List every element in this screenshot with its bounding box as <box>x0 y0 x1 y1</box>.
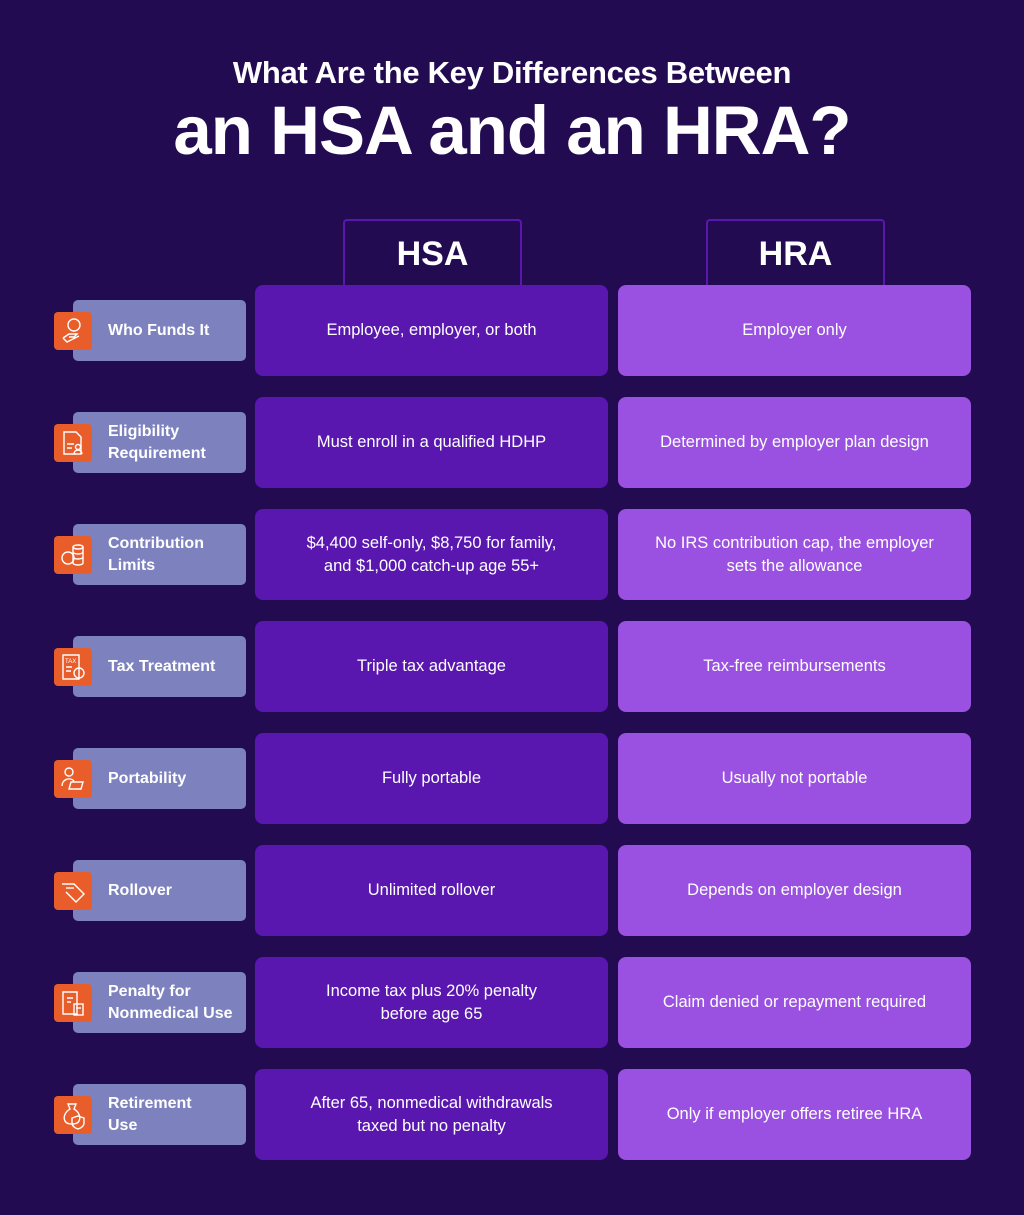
header: HSA <box>343 219 522 285</box>
row 3 HRA: No IRS contribution cap, the employer <box>655 534 934 552</box>
row 2 HRA: Determined by employer plan design <box>660 433 929 451</box>
row 5 label: Portability <box>108 770 186 786</box>
row 3 HRA <box>618 509 971 600</box>
icon: money bag shield <box>54 1096 92 1134</box>
icon: person laptop <box>54 760 92 798</box>
row 6 HSA: Unlimited rollover <box>368 881 495 899</box>
row 8 HRA: Only if employer offers retiree HRA <box>667 1105 922 1123</box>
row 8 HSA: After 65, nonmedical withdrawals <box>310 1094 553 1112</box>
icon: tax document <box>54 648 92 686</box>
row 7 HSA: before age 65 <box>381 1004 482 1022</box>
row 8 label <box>73 1084 246 1145</box>
row 8 HSA: taxed but no penalty <box>357 1116 506 1134</box>
row 7 label <box>73 972 246 1033</box>
row 2 label: Requirement <box>108 444 206 462</box>
icon: document person <box>54 424 92 462</box>
row 8 label: Use <box>108 1116 137 1134</box>
row 4 label: Tax Treatment <box>108 658 215 674</box>
row 1 label <box>73 300 246 361</box>
row 1 HSA: Employee, employer, or both <box>326 321 537 339</box>
row 7 HSA: Income tax plus 20% penalty <box>326 982 537 1000</box>
row 2 HRA <box>618 397 971 488</box>
row 3 HSA <box>255 509 608 600</box>
row 8 HSA <box>255 1069 608 1160</box>
row 7 label: Nonmedical Use <box>108 1004 232 1022</box>
row 7 label: Penalty for <box>108 982 191 1000</box>
row 8 label: Retirement <box>108 1094 192 1112</box>
row 6 label <box>73 860 246 921</box>
row 2 label <box>73 412 246 473</box>
row 4 HRA <box>618 621 971 712</box>
row 6 label: Rollover <box>108 882 172 898</box>
row 6 HRA <box>618 845 971 936</box>
icon: tax document: TAX <box>65 659 76 665</box>
row 6 HSA <box>255 845 608 936</box>
icon: coins <box>54 536 92 574</box>
header: HSA: HSA <box>397 235 468 273</box>
row 3 label <box>73 524 246 585</box>
icon: rollover arrow <box>54 872 92 910</box>
row 1 HSA <box>255 285 608 376</box>
row 5 HRA: Usually not portable <box>722 769 867 787</box>
row 1 HRA <box>618 285 971 376</box>
row 4 HSA: Triple tax advantage <box>357 657 506 675</box>
title: What Are the Key Differences Between <box>233 55 791 90</box>
row 3 label: Limits <box>108 556 155 574</box>
row 7 HSA <box>255 957 608 1048</box>
row 2 HSA <box>255 397 608 488</box>
row 8 HRA <box>618 1069 971 1160</box>
row 7 HRA: Claim denied or repayment required <box>663 993 926 1011</box>
row 2 label: Eligibility <box>108 422 179 440</box>
row 5 HRA <box>618 733 971 824</box>
row 1 label: Who Funds It <box>108 322 209 338</box>
row 3 HSA: $4,400 self-only, $8,750 for family, <box>307 534 556 552</box>
row 3 HRA: sets the allowance <box>727 556 862 574</box>
row 4 label <box>73 636 246 697</box>
icon: hand coin <box>54 312 92 350</box>
row 4 HSA <box>255 621 608 712</box>
row 1 HRA: Employer only <box>742 321 847 339</box>
header: HRA <box>706 219 885 285</box>
row 4 HRA: Tax-free reimbursements <box>703 657 886 675</box>
row 5 HSA: Fully portable <box>382 769 481 787</box>
subtitle: an HSA and an HRA? <box>173 92 851 169</box>
row 7 HRA <box>618 957 971 1048</box>
row 2 HSA: Must enroll in a qualified HDHP <box>317 433 546 451</box>
row 5 label <box>73 748 246 809</box>
row 3 HSA: and $1,000 catch-up age 55+ <box>324 556 539 574</box>
row 5 HSA <box>255 733 608 824</box>
header: HRA: HRA <box>759 235 832 273</box>
row 3 label: Contribution <box>108 534 204 552</box>
row 6 HRA: Depends on employer design <box>687 881 902 899</box>
icon: clipboard calculator <box>54 984 92 1022</box>
